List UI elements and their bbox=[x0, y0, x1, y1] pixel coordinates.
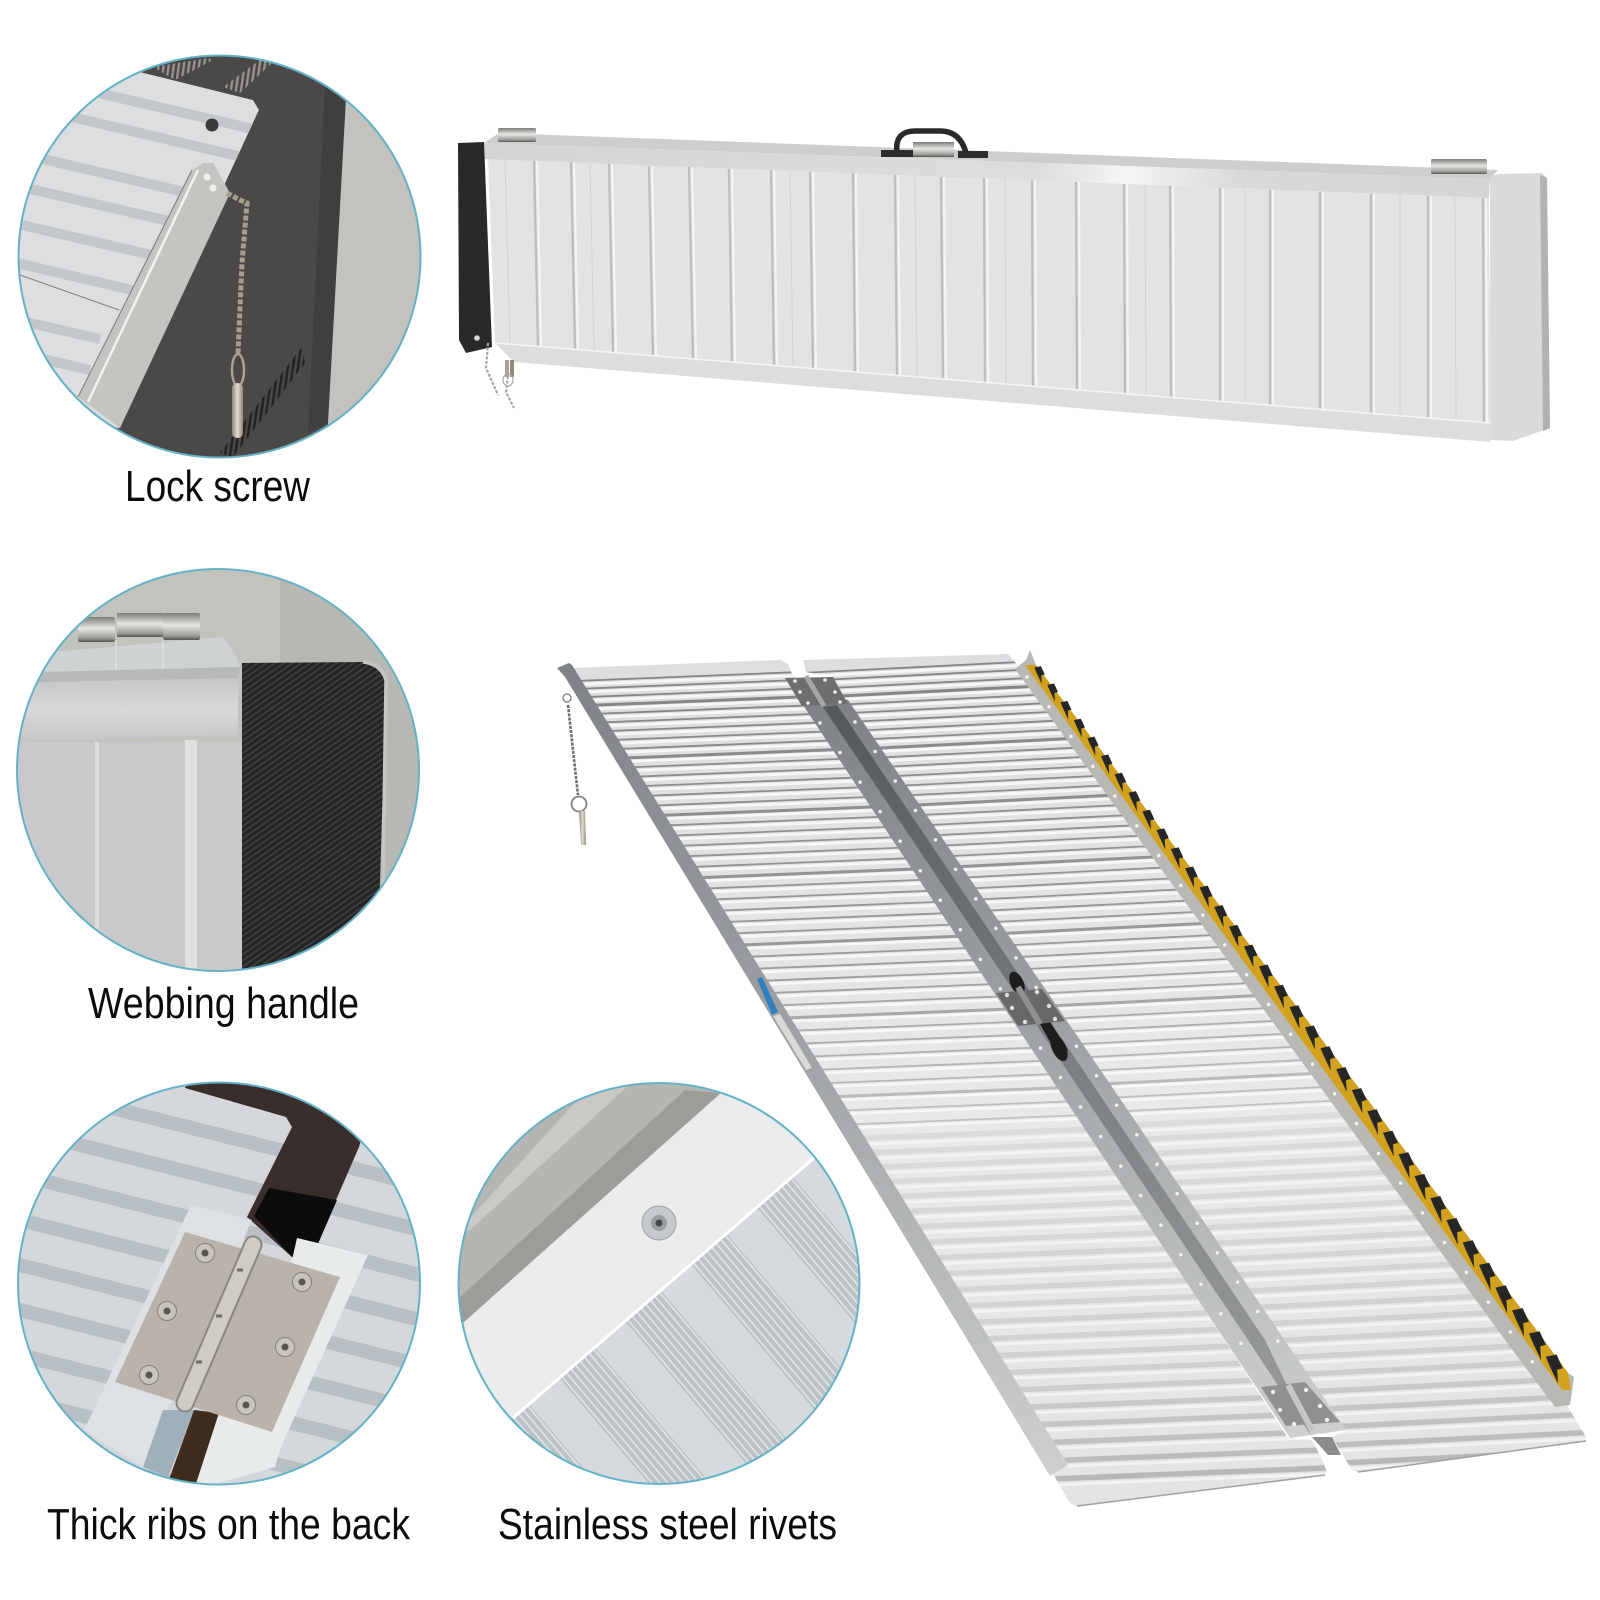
side rail bbox=[78, 163, 230, 428]
panel: thick ribs detail circle bbox=[17, 1082, 421, 1486]
top hinge bbox=[785, 676, 848, 706]
caption: webbing handle: Webbing handle bbox=[88, 979, 359, 1028]
left hinge bbox=[498, 128, 536, 142]
ramp deck plate bbox=[20, 72, 259, 428]
centre rail bbox=[793, 690, 1346, 1455]
ribbed deck bbox=[464, 1096, 858, 1483]
bottom bar bbox=[495, 343, 1490, 442]
caption: thick ribs: Thick ribs on the back bbox=[47, 1500, 411, 1549]
middle hinge with rollers bbox=[996, 969, 1071, 1064]
rivet bbox=[642, 1206, 676, 1240]
blue label sticker bbox=[757, 977, 778, 1015]
right side rail bbox=[1015, 650, 1574, 1407]
centre rail bbox=[84, 1205, 368, 1490]
bottom hinge bbox=[1261, 1382, 1340, 1430]
panel: webbing handle detail circle bbox=[16, 568, 420, 972]
top header bar bbox=[484, 143, 1490, 198]
panel: lock screw detail circle bbox=[18, 54, 422, 458]
steel hinge bbox=[115, 1232, 340, 1432]
white flange bbox=[464, 1094, 813, 1418]
carry handle bbox=[881, 131, 988, 158]
ribbed body bbox=[18, 742, 242, 970]
left deck bbox=[574, 660, 1327, 1506]
caption: stainless rivets: Stainless steel rivets bbox=[498, 1500, 837, 1549]
panel: stainless rivets detail circle bbox=[450, 1075, 870, 1495]
back folded panel bbox=[1490, 173, 1550, 441]
back rail bbox=[484, 133, 1498, 179]
white spec sticker bbox=[773, 1014, 812, 1070]
panel: unfolded ramp bbox=[500, 630, 1600, 1520]
right hinge bbox=[1431, 159, 1487, 174]
right deck bbox=[803, 654, 1586, 1472]
caption: lock screw: Lock screw bbox=[125, 462, 310, 511]
black grip pad bbox=[458, 142, 492, 353]
black mesh pad bbox=[242, 662, 386, 985]
dark wall gap bbox=[185, 1084, 360, 1257]
hinge bbox=[78, 613, 200, 642]
left side rail bbox=[557, 663, 1068, 1476]
ramp flap edges bbox=[1077, 1441, 1586, 1506]
chain and pin bbox=[227, 193, 247, 438]
lock chains bbox=[486, 343, 514, 408]
back strip bbox=[43, 637, 240, 672]
ribbed panel body bbox=[488, 159, 1490, 423]
header bar bbox=[20, 678, 238, 741]
panel: folded ramp carry view bbox=[458, 128, 1550, 442]
yellow and black warning strip bbox=[1025, 665, 1571, 1390]
lock chain and pin bbox=[563, 694, 586, 845]
